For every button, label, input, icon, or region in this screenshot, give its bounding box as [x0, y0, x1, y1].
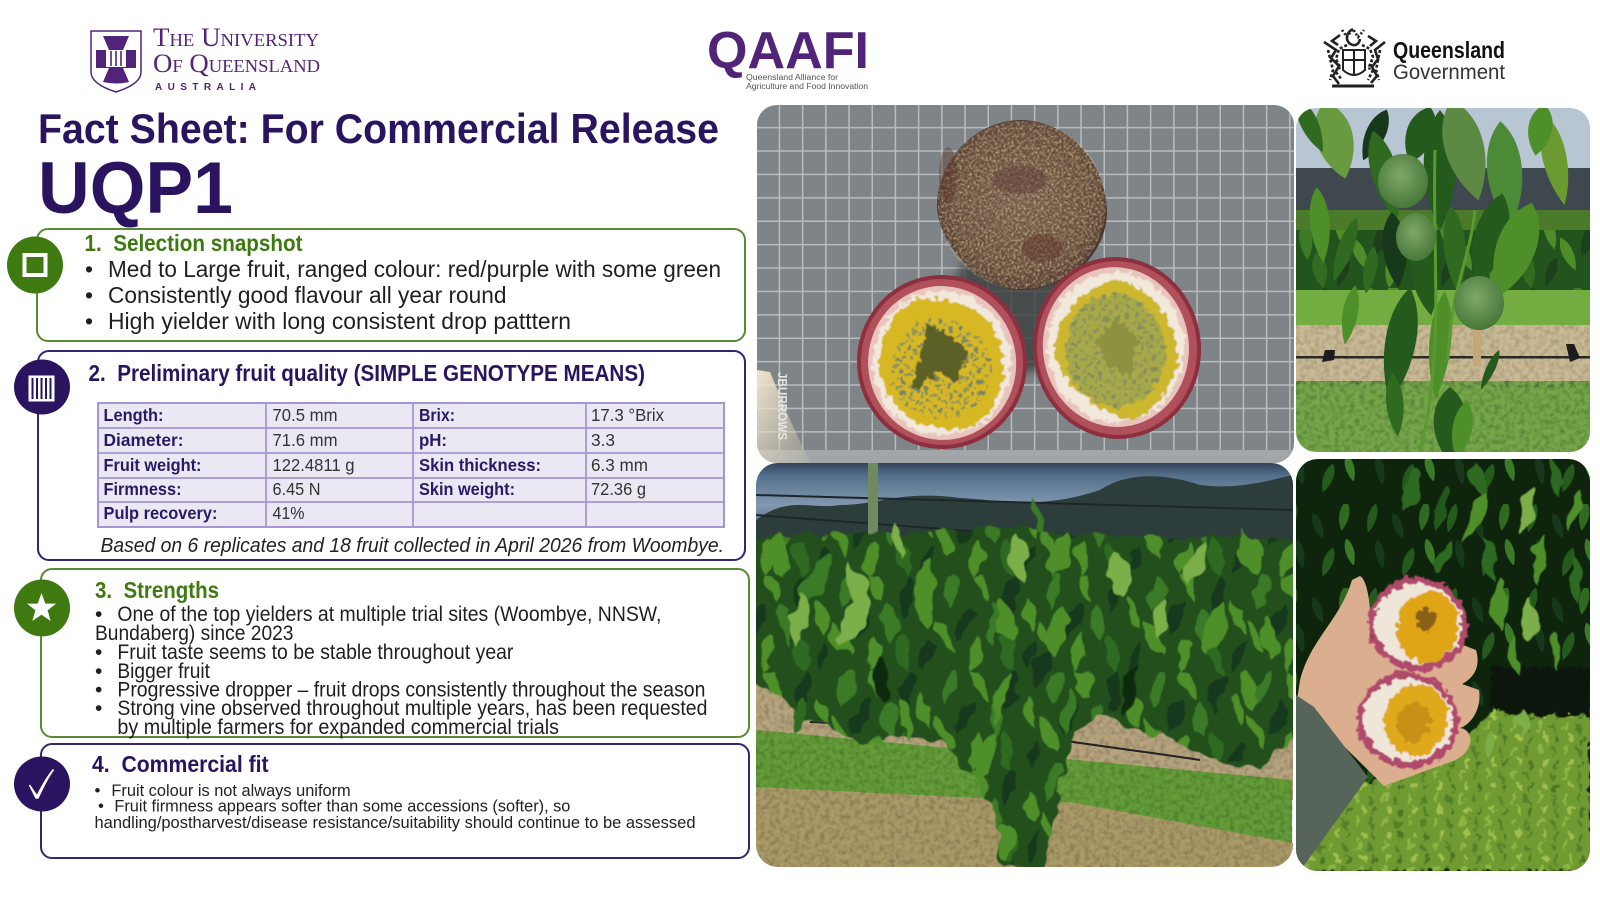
logo: Queensland Government: [1324, 29, 1505, 86]
photo: whole and halved passionfruit on cutting mat: JBURROWS: [775, 372, 790, 440]
bullet list: [85, 256, 721, 334]
bullet list: •: [94, 781, 100, 800]
bullet list: Bigger fruit: [117, 660, 210, 683]
bullet list: •: [85, 308, 93, 334]
bullet list: Strong vine observed throughout multiple years, has been requested: [117, 697, 707, 720]
table: 6.45 N: [272, 479, 320, 499]
heading: 4. Commercial fit: [92, 751, 269, 777]
bullet list: •: [98, 797, 104, 816]
table: 6.3 mm: [591, 455, 648, 475]
title: Fact Sheet: For Commercial Release: [38, 105, 719, 152]
table: pH:: [419, 430, 447, 450]
icon: UQ shield: [91, 31, 141, 92]
heading: 3. Strengths: [95, 577, 219, 603]
heading: 2. Preliminary fruit quality (SIMPLE GENOTYPE MEANS): [88, 360, 645, 386]
bullet list: •: [95, 678, 102, 702]
icon: square: [7, 236, 63, 294]
left halved fruit: [856, 275, 1027, 449]
logo: Queensland Government: Queensland: [1393, 37, 1505, 63]
bullet list: Consistently good flavour all year round: [108, 282, 506, 308]
table: [98, 403, 724, 527]
photo: hand holding two cut fruit: [1296, 457, 1590, 875]
bullet list: •: [85, 256, 93, 282]
table: 122.4811 g: [272, 455, 354, 475]
bullet list: Fruit firmness appears softer than some accessions (softer), so: [114, 797, 570, 816]
bullet list: Fruit colour is not always uniform: [111, 781, 351, 800]
foreground leaves: [1298, 108, 1568, 452]
table: Skin thickness:: [419, 455, 541, 475]
table: 72.36 g: [591, 479, 646, 499]
right halved fruit: [1032, 257, 1202, 439]
logo: Queensland Government: Government: [1393, 61, 1505, 84]
panel: strengths: [14, 569, 749, 739]
logo: The University of Queensland: [91, 23, 320, 93]
table: Length:: [104, 405, 164, 425]
logo: QAAFI: QAAFI: [707, 22, 869, 80]
photo: vine row in the field: [750, 463, 1300, 867]
bullet list: Fruit taste seems to be stable throughout year: [117, 641, 513, 664]
bullet list: High yielder with long consistent drop patttern: [108, 308, 571, 334]
bullet list: One of the top yielders at multiple trial sites (Woombye, NNSW,: [117, 603, 661, 626]
bullet list: [95, 603, 707, 739]
bullet list: Bundaberg) since 2023: [95, 622, 294, 645]
lower fruit half: [1355, 669, 1462, 770]
heading: 1. Selection snapshot: [84, 230, 303, 256]
icon: star: [14, 580, 70, 636]
logo: QAAFI: Agriculture and Food Innovation: [746, 82, 868, 91]
vine foliage mass: [750, 527, 1300, 867]
table: 70.5 mm: [272, 405, 338, 425]
table: Skin weight:: [419, 479, 515, 499]
icon: coat of arms: [1324, 29, 1385, 86]
bullet list: •: [95, 603, 102, 626]
table: 17.3 °Brix: [591, 405, 664, 425]
logo: The University of Queensland: The University: [153, 23, 319, 52]
hand: [1297, 576, 1479, 786]
table: Pulp recovery:: [104, 503, 218, 523]
foliage highlight leaves: [1396, 457, 1587, 760]
bullet list: •: [95, 660, 102, 683]
table: Firmness:: [104, 479, 182, 499]
icon: columns: [14, 360, 70, 414]
foliage highlight leaves: [772, 498, 1280, 861]
photo: whole and halved passionfruit on cutting mat: [757, 105, 1294, 463]
bullet list: •: [95, 641, 102, 664]
bullet list: handling/postharvest/disease resistance/suitability should continue to be assessed: [94, 813, 696, 832]
logo: The University of Queensland: Of Queensland: [153, 49, 320, 78]
table: 41%: [272, 503, 304, 523]
photo: young fruit on vine: [1289, 94, 1590, 463]
logo: The University of Queensland: AUSTRALIA: [155, 82, 256, 93]
bullet list: •: [85, 282, 93, 308]
bullet list: Progressive dropper – fruit drops consistently throughout the season: [117, 678, 705, 702]
table note: Based on 6 replicates and 18 fruit collected in April 2026 from Woombye.: [100, 534, 724, 557]
icon: check mark: [14, 756, 70, 812]
table: 3.3: [591, 430, 615, 450]
variety name: UQP1: [38, 148, 233, 229]
panel: fruit quality: [14, 351, 745, 560]
sleeve: [1296, 695, 1368, 875]
table: 71.6 mm: [272, 430, 338, 450]
panel: commercial fit: [14, 744, 749, 858]
table: Diameter:: [104, 430, 184, 450]
bullet list: by multiple farmers for expanded commercial trials: [117, 716, 559, 739]
table: Brix:: [419, 405, 455, 425]
bullet list: [94, 781, 696, 832]
upper fruit half: [1366, 574, 1470, 674]
bullet list: •: [95, 697, 102, 720]
whole fruit: [935, 118, 1110, 293]
bullet list: Med to Large fruit, ranged colour: red/purple with some green: [108, 256, 721, 282]
table: Fruit weight:: [104, 455, 202, 475]
panel: selection snapshot: [7, 229, 745, 341]
logo: QAAFI: Queensland Alliance for: [746, 73, 838, 82]
